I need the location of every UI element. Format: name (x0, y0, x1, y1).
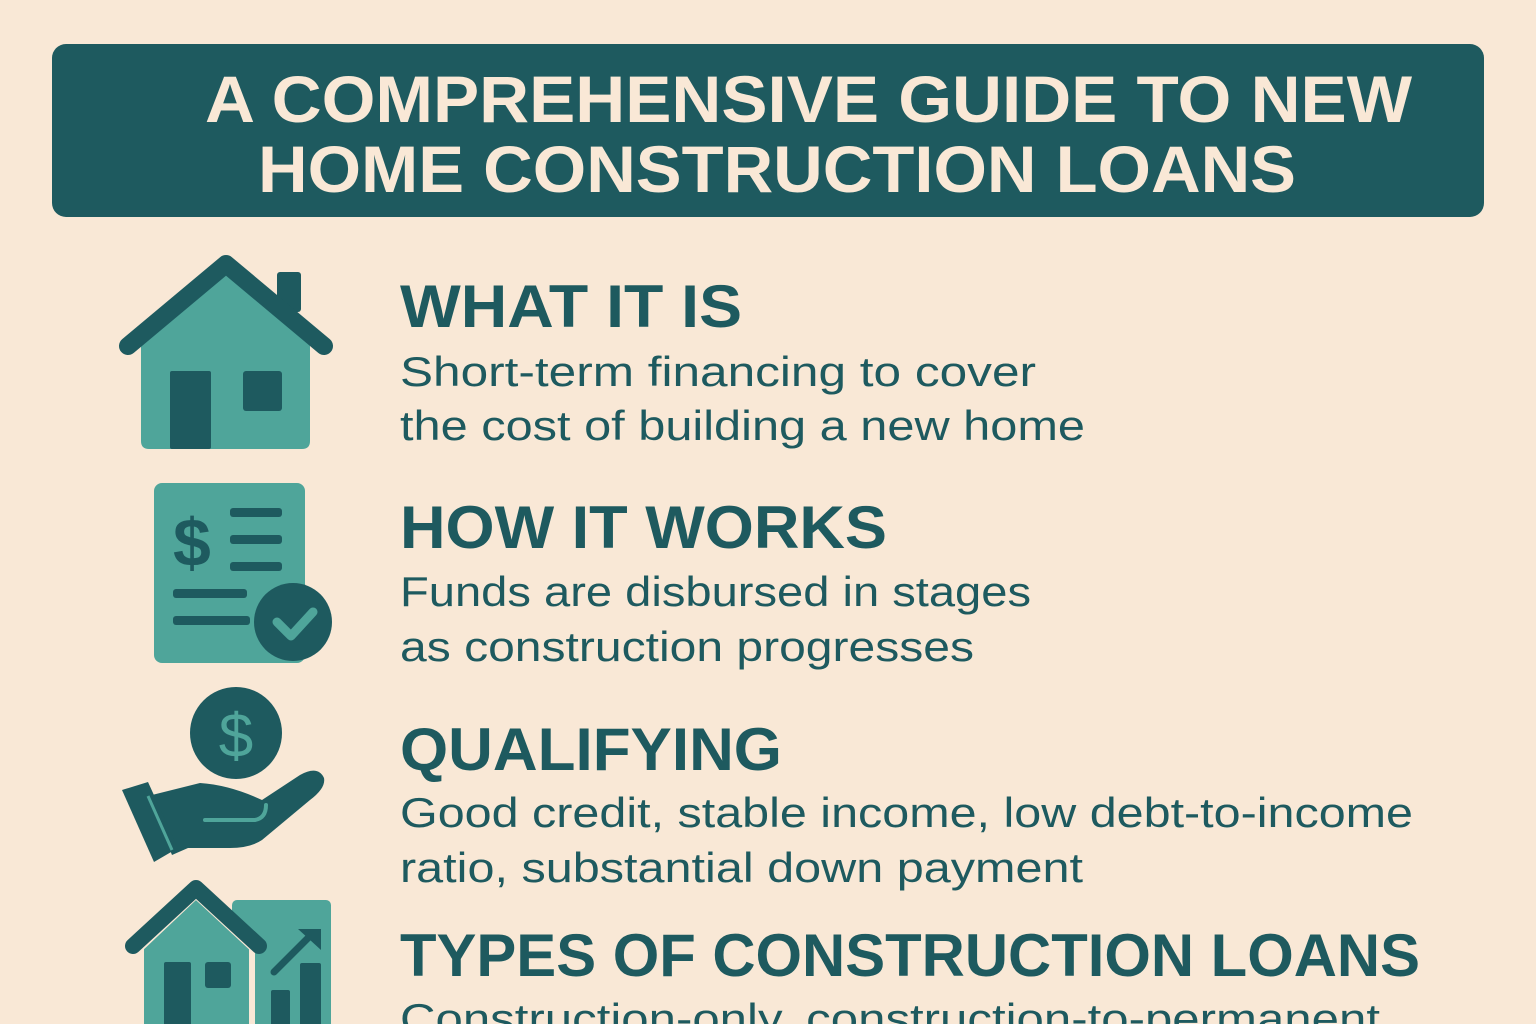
title banner: A COMPREHENSIVE GUIDE TO NEW (205, 62, 1413, 136)
icon: house with chart (133, 888, 331, 1024)
heading: types of construction loans: TYPES OF CONSTRUCTION LOANS (400, 922, 1420, 989)
text: qualifying: Good credit, stable income, low debt-to-income (400, 789, 1413, 836)
icon: house (128, 264, 324, 449)
heading: what it is: WHAT IT IS (400, 273, 742, 340)
title banner: HOME CONSTRUCTION LOANS (258, 132, 1296, 206)
text: qualifying (400, 789, 1413, 891)
text: how it works: as construction progresses (400, 623, 974, 670)
text: how it works: Funds are disbursed in stages (400, 568, 1031, 615)
text: what it is: the cost of building a new home (400, 402, 1085, 449)
title banner (52, 44, 1484, 217)
heading: qualifying: QUALIFYING (400, 716, 782, 783)
icon: hand with coin (122, 687, 324, 862)
text: qualifying: ratio, substantial down payment (400, 844, 1083, 891)
icon: hand with coin: $ (219, 702, 253, 771)
heading: how it works: HOW IT WORKS (400, 494, 887, 561)
text: what it is (400, 348, 1085, 449)
text: how it works (400, 568, 1031, 670)
icon: document with check: $ (173, 505, 211, 581)
text: what it is: Short-term financing to cover (400, 348, 1036, 395)
icon: document with check (154, 483, 332, 663)
